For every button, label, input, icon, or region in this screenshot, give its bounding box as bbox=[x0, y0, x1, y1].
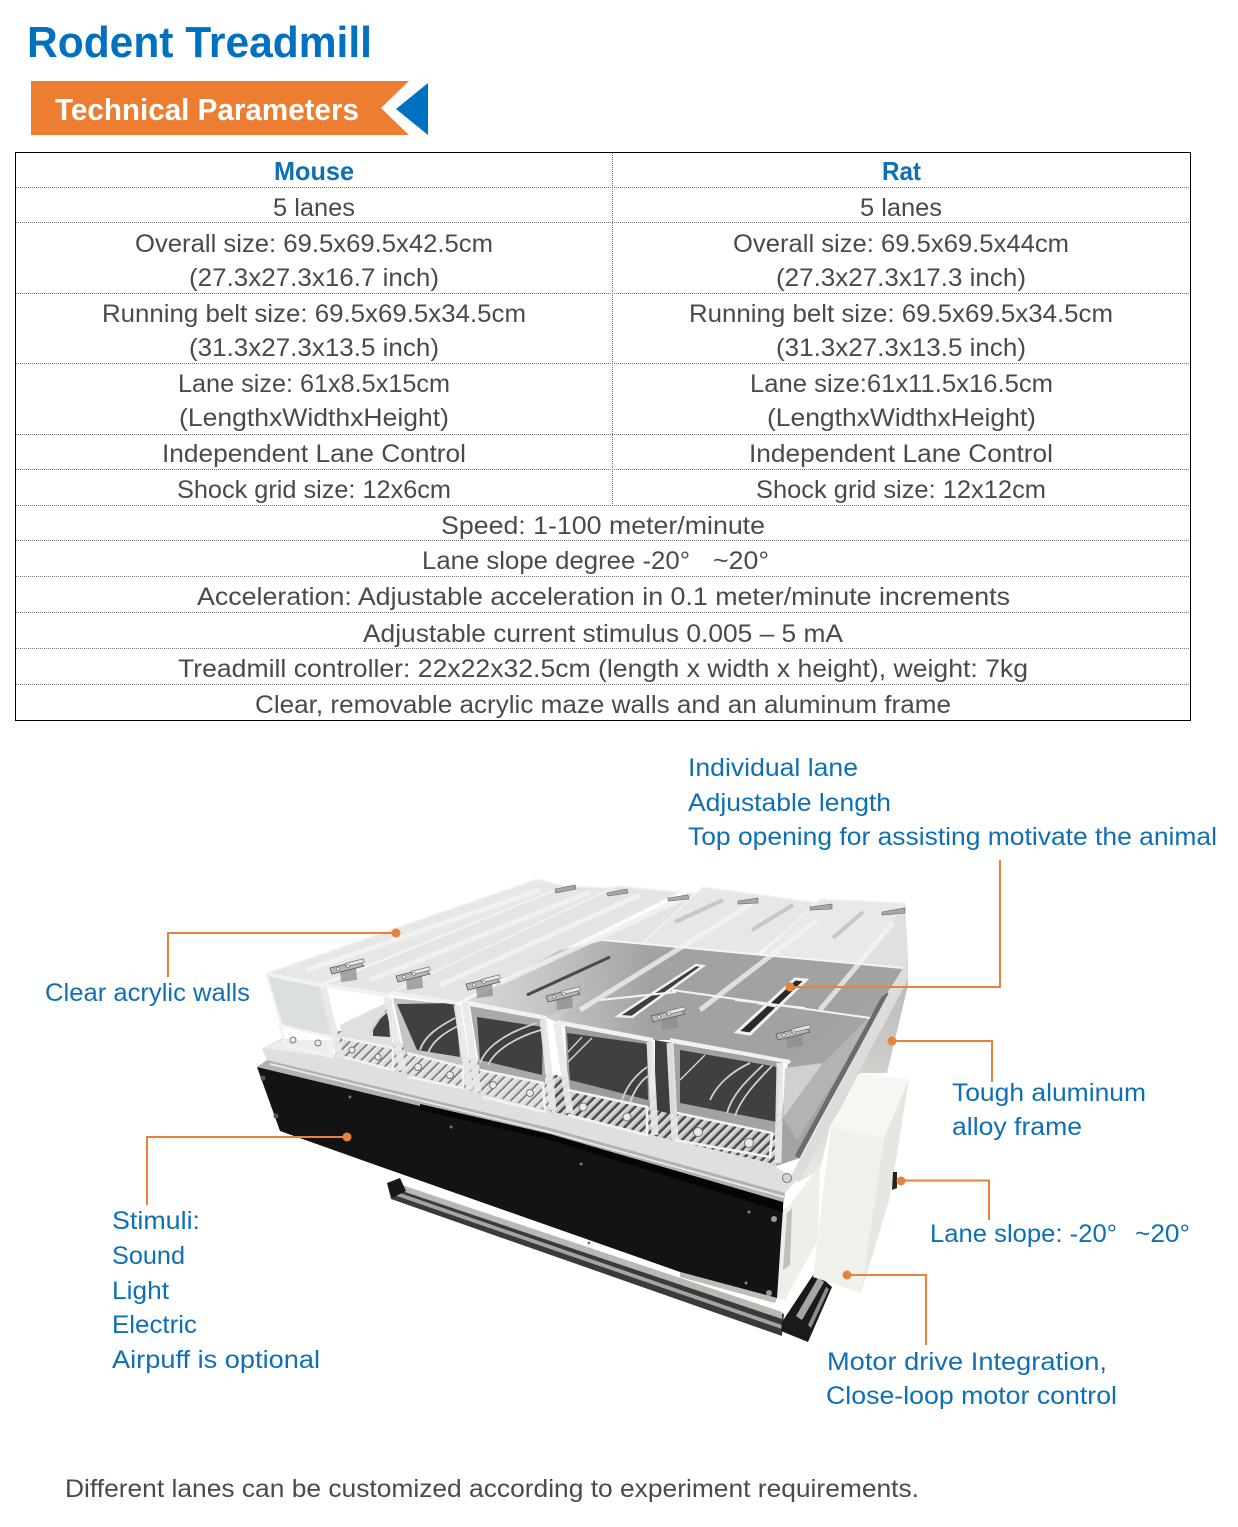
shared rows: Speed: 1-100 meter/minute bbox=[441, 512, 765, 540]
callout: stimuli: Stimuli: bbox=[112, 1207, 200, 1235]
callout: lane slope bbox=[896, 1176, 1190, 1248]
callout: lane slope: ~20° bbox=[1135, 1220, 1190, 1248]
gray floor beyond lane 6 bbox=[776, 957, 908, 1182]
lid rails bbox=[307, 890, 893, 1010]
callout: individual lane: Top opening for assisting motivate the animal bbox=[688, 823, 1217, 851]
column: mouse: Running belt size: 69.5x69.5x34.5cm bbox=[102, 300, 526, 328]
column: mouse: (27.3x27.3x16.7 inch) bbox=[189, 264, 439, 292]
column: mouse: Lane size: 61x8.5x15cm bbox=[178, 370, 450, 398]
callout: aluminum frame: Tough aluminum bbox=[952, 1079, 1146, 1107]
column: rat: 5 lanes bbox=[860, 194, 942, 222]
top opening slots bbox=[737, 979, 806, 1034]
frame corner screw bbox=[782, 1174, 792, 1182]
hinges bbox=[330, 885, 905, 1048]
callout: aluminum frame bbox=[888, 1036, 1146, 1141]
floor grid bars bbox=[335, 1030, 790, 1166]
callout: motor drive: Close-loop motor control bbox=[826, 1382, 1117, 1410]
see-through floor under lids bbox=[465, 941, 903, 1062]
callout: lane slope: Lane slope: -20° bbox=[930, 1220, 1117, 1248]
callout: clear acrylic walls: Clear acrylic walls bbox=[45, 979, 250, 1007]
callout: stimuli: Light bbox=[112, 1277, 169, 1305]
cross rungs bbox=[600, 940, 903, 1018]
callout: individual lane: Adjustable length bbox=[688, 789, 891, 817]
fence bolts bbox=[290, 1037, 754, 1148]
shared rows: Adjustable current stimulus 0.005 – 5 mA bbox=[363, 620, 843, 648]
column: mouse bbox=[102, 156, 526, 504]
shared rows bbox=[178, 512, 1028, 719]
callout: motor drive bbox=[826, 1270, 1117, 1410]
column: mouse: Mouse bbox=[274, 156, 354, 186]
control box bbox=[813, 1074, 909, 1293]
shared rows: Treadmill controller: 22x22x32.5cm (length x width x height), weight: 7kg bbox=[178, 655, 1028, 683]
column: mouse: Overall size: 69.5x69.5x42.5cm bbox=[135, 230, 493, 258]
callout: clear acrylic walls bbox=[45, 928, 400, 1007]
right side of frame bbox=[797, 957, 908, 1183]
callout: individual lane bbox=[688, 754, 1217, 992]
shared rows: Clear, removable acrylic maze walls and an aluminum frame bbox=[255, 691, 951, 719]
callout: stimuli: Sound bbox=[112, 1242, 185, 1270]
lane interiors bbox=[340, 998, 782, 1133]
parameters table bbox=[16, 152, 1190, 720]
column: rat: Lane size:61x11.5x16.5cm bbox=[750, 370, 1053, 398]
column: rat: (27.3x27.3x17.3 inch) bbox=[776, 264, 1026, 292]
callout: individual lane: Individual lane bbox=[688, 754, 858, 782]
white side cover bbox=[775, 1165, 820, 1300]
shared rows: ~20° bbox=[713, 547, 769, 575]
column: rat: Shock grid size: 12x12cm bbox=[756, 476, 1046, 504]
column: rat bbox=[689, 156, 1113, 504]
shared rows: Acceleration: Adjustable acceleration in 0.1 meter/minute increments bbox=[197, 583, 1010, 611]
banner: technical parameters bbox=[31, 81, 428, 135]
shared rows: Lane slope degree -20° bbox=[422, 547, 690, 575]
treadmill illustration bbox=[257, 879, 909, 1342]
lane belts bbox=[370, 1003, 778, 1122]
column: mouse: (31.3x27.3x13.5 inch) bbox=[189, 334, 439, 362]
front plate and extrusion bbox=[257, 1038, 797, 1208]
banner: technical parameters: Technical Parameters bbox=[55, 92, 359, 127]
callout: motor drive: Motor drive Integration, bbox=[827, 1348, 1107, 1376]
callout: aluminum frame: alloy frame bbox=[952, 1113, 1082, 1141]
column: mouse: (LengthxWidthxHeight) bbox=[179, 404, 449, 432]
column: rat: Overall size: 69.5x69.5x44cm bbox=[733, 230, 1069, 258]
callout: stimuli bbox=[112, 1132, 352, 1374]
acrylic lane lids bbox=[267, 879, 908, 1062]
column: rat: Independent Lane Control bbox=[749, 440, 1053, 468]
column: rat: Rat bbox=[882, 156, 921, 186]
column: mouse: Independent Lane Control bbox=[162, 440, 466, 468]
title: Rodent Treadmill bbox=[27, 18, 372, 67]
lane front frames and posts bbox=[267, 974, 790, 1163]
callout: stimuli: Electric bbox=[112, 1311, 197, 1339]
callout: stimuli: Airpuff is optional bbox=[112, 1346, 320, 1374]
black front panel bbox=[257, 1067, 783, 1303]
column: rat: (LengthxWidthxHeight) bbox=[767, 404, 1036, 432]
footer note: Different lanes can be customized according to experiment requirements. bbox=[65, 1475, 919, 1503]
column: mouse: Shock grid size: 12x6cm bbox=[177, 476, 451, 504]
column: rat: (31.3x27.3x13.5 inch) bbox=[776, 334, 1026, 362]
column: mouse: 5 lanes bbox=[273, 194, 355, 222]
lane 1 end box bbox=[262, 975, 335, 1057]
base rail and foot bbox=[387, 1178, 832, 1342]
column: rat: Running belt size: 69.5x69.5x34.5cm bbox=[689, 300, 1113, 328]
